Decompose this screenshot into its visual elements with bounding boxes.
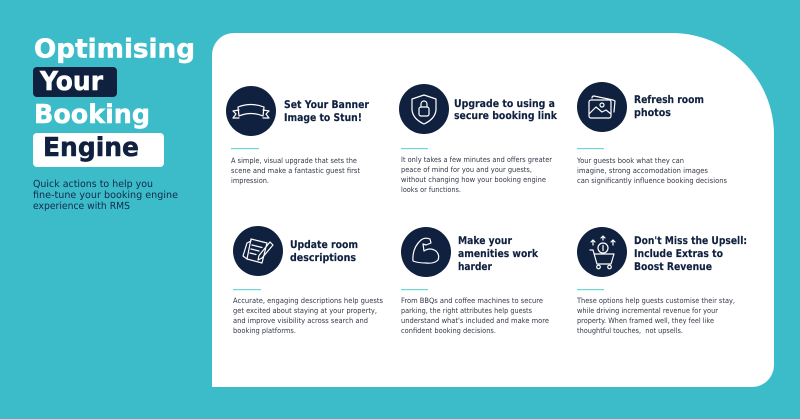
card: banner image	[226, 86, 370, 185]
card: update room descriptions	[233, 226, 383, 335]
card: refresh room photos	[576, 82, 727, 185]
body text: and improve visibility across search and	[233, 316, 368, 325]
subtitle: Quick actions to help you	[33, 179, 153, 190]
subtitle	[33, 179, 178, 212]
icon: cart with coin	[577, 227, 627, 277]
heading	[454, 98, 558, 122]
body text: peace of mind for you and your guests,	[401, 165, 532, 174]
subtitle: experience with RMS	[33, 201, 130, 212]
heading	[634, 235, 747, 273]
body text: These options help guests customise their stay,	[576, 296, 735, 305]
title: Engine	[43, 133, 139, 163]
body text: understand what's included and make more	[401, 316, 549, 325]
card: upsell	[576, 227, 747, 335]
heading	[458, 235, 539, 273]
body text: parking, the right attributes help guests	[401, 306, 532, 315]
card: amenities	[401, 227, 549, 335]
heading	[284, 99, 370, 124]
body text: It only takes a few minutes and offers greater	[401, 155, 552, 164]
body text: looks or functions.	[401, 185, 461, 194]
title: Booking	[34, 100, 150, 130]
heading: descriptions	[290, 252, 356, 264]
body text	[401, 155, 552, 194]
card: secure booking link	[399, 84, 558, 194]
icon: photos	[577, 82, 627, 132]
white content panel	[212, 33, 774, 387]
body text: confident booking decisions.	[401, 326, 496, 335]
title: Your	[39, 67, 103, 97]
title	[33, 34, 195, 167]
body text: scene and make a fantastic guest first	[231, 166, 360, 175]
body text	[233, 296, 383, 335]
body text: imagine, strong accomodation images	[577, 166, 708, 175]
icon: document and pen	[233, 226, 283, 276]
body text: impression.	[231, 176, 269, 185]
heading: Boost Revenue	[634, 261, 712, 273]
heading: Update room	[290, 239, 358, 251]
body text	[576, 296, 735, 335]
heading: Refresh room	[634, 94, 704, 106]
icon: flexed arm	[401, 227, 451, 277]
body text: Accurate, engaging descriptions help guests	[233, 296, 383, 305]
heading: photos	[634, 107, 671, 119]
heading: Upgrade to using a	[454, 98, 555, 110]
body text	[576, 156, 727, 185]
body text: From BBQs and coffee machines to secure	[401, 296, 543, 305]
body text: Your guests book what they can	[576, 156, 684, 165]
heading	[290, 239, 358, 264]
heading: secure booking link	[454, 110, 558, 122]
body text: without changing how your booking engine	[401, 175, 546, 184]
body text: booking platforms.	[233, 326, 296, 335]
heading	[634, 94, 704, 119]
heading: Image to Stun!	[284, 112, 362, 124]
heading: Set Your Banner	[284, 99, 370, 111]
icon: ribbon banner	[226, 86, 276, 136]
body text	[401, 296, 549, 335]
body text: get excited about staying at your property,	[233, 306, 377, 315]
body text: property. When framed well, they feel like	[577, 316, 714, 325]
body text: while driving incremental revenue for your	[577, 306, 718, 315]
heading: harder	[458, 261, 493, 273]
body text: thoughtful touches, not upsells.	[577, 326, 683, 335]
heading: Make your	[458, 235, 513, 247]
heading: Don't Miss the Upsell:	[634, 235, 747, 247]
body text	[231, 156, 360, 185]
title: Optimising	[34, 34, 195, 64]
body text: A simple, visual upgrade that sets the	[231, 156, 357, 165]
heading: amenities work	[458, 248, 539, 260]
heading: Include Extras to	[634, 248, 723, 260]
body text: can significantly influence booking decisions	[577, 176, 727, 185]
subtitle: fine-tune your booking engine	[33, 190, 178, 201]
icon: shield with padlock	[399, 84, 449, 134]
